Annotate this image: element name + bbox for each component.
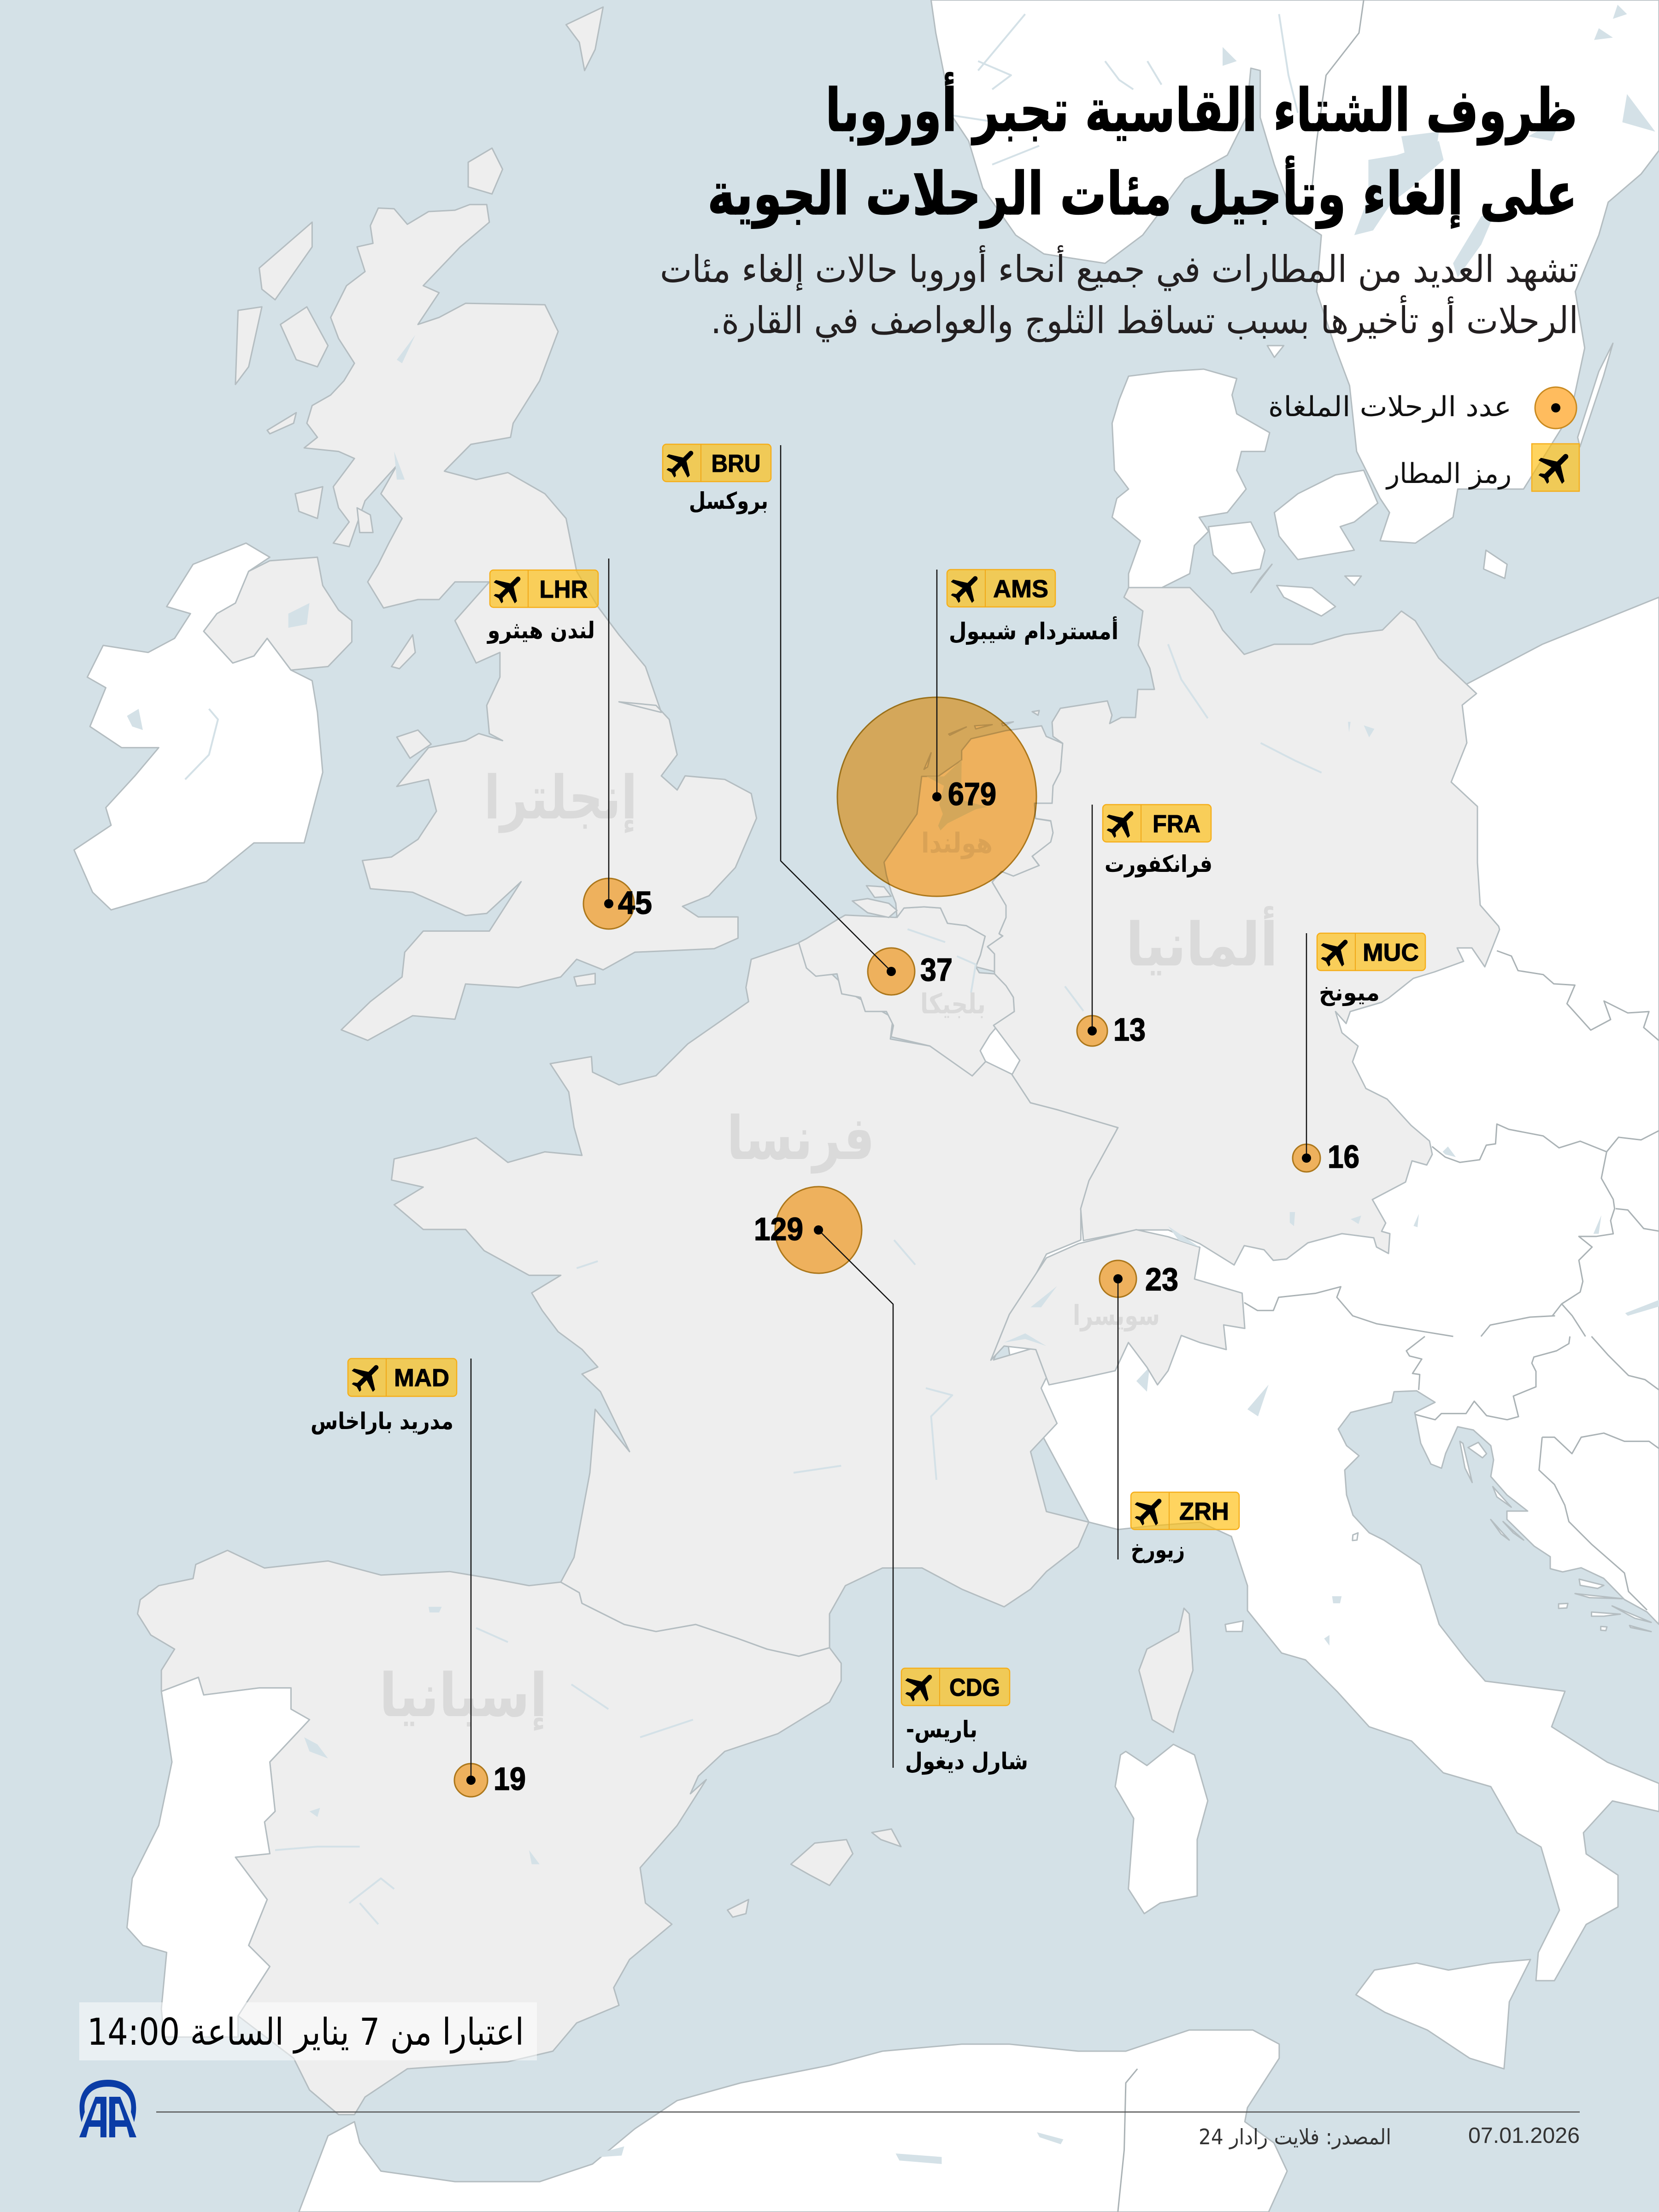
logo: AA xyxy=(79,2080,136,2137)
subtitle xyxy=(660,245,1578,342)
label: LHR xyxy=(486,567,598,644)
marker: MUC 16: 16 xyxy=(1328,1139,1359,1175)
land: Spain and Portugal xyxy=(127,943,1118,2115)
label: England: إنجلترا xyxy=(484,763,637,833)
label: LHR: LHR xyxy=(539,576,588,603)
marker: MUC 16 xyxy=(1293,933,1359,1175)
marker: AMS 679 xyxy=(837,570,1036,896)
legend: airport code text: رمز المطار xyxy=(1385,458,1512,490)
marker: BRU 37: 37 xyxy=(920,952,953,988)
label: ZRH: ZRH xyxy=(1179,1498,1229,1525)
label: BRU: بروكسل xyxy=(689,488,768,515)
label: MUC: ميونخ xyxy=(1319,979,1380,1006)
legend: cancelled flights circle xyxy=(1535,387,1577,429)
label: MUC xyxy=(1314,930,1425,1006)
label: ZRH: زيورخ xyxy=(1131,1536,1185,1564)
marker: MAD 19: 19 xyxy=(494,1761,526,1797)
label: MAD: MAD xyxy=(394,1364,449,1392)
marker: CDG 129 xyxy=(754,1187,893,1768)
land: Corsica, Sardinia, Sicily xyxy=(1115,1367,1530,2069)
label: Switzerland: سويسرا xyxy=(1073,1300,1160,1332)
marker: LHR 45: 45 xyxy=(618,885,652,921)
label: France: فرنسا xyxy=(727,1103,875,1174)
marker: ZRH 23 xyxy=(1100,1260,1178,1559)
label: AMS xyxy=(944,566,1118,645)
timestamp box: اعتبارا من 7 يناير الساعة 14:00 xyxy=(87,2011,524,2054)
legend: airport code swatch xyxy=(1531,443,1579,491)
marker: FRA 13 xyxy=(1077,805,1146,1047)
date: 07.01.2026 xyxy=(1468,2124,1580,2148)
label: FRA: FRA xyxy=(1153,810,1200,838)
label: MAD: مدريد باراخاس xyxy=(311,1408,453,1435)
legend: cancelled flights text: عدد الرحلات الملغاة xyxy=(1268,391,1512,423)
label: MAD xyxy=(311,1355,457,1435)
subtitle: تشهد العديد من المطارات في جميع أنحاء أوروبا حالات إلغاء مئات xyxy=(660,245,1578,291)
marker: FRA 13: 13 xyxy=(1113,1012,1146,1047)
marker: ZRH 23: 23 xyxy=(1145,1261,1178,1297)
label: ZRH xyxy=(1128,1489,1239,1564)
marker: LHR 45 xyxy=(583,559,652,929)
label: LHR: لندن هيثرو xyxy=(486,617,595,644)
label: CDG: CDG xyxy=(949,1674,1000,1701)
marker: MAD 19 xyxy=(454,1359,526,1797)
label: Belgium: بلجيكا xyxy=(920,988,986,1020)
marker: AMS 679: 679 xyxy=(948,776,996,812)
label: BRU: BRU xyxy=(712,450,760,477)
label: MUC: MUC xyxy=(1363,939,1419,966)
title xyxy=(707,72,1577,229)
land: France xyxy=(392,943,1118,1656)
label: CDG xyxy=(899,1665,1028,1775)
label: FRA xyxy=(1100,801,1212,878)
land: Germany xyxy=(988,588,1500,1265)
country labels xyxy=(379,763,1278,1731)
subtitle: الرحلات أو تأخيرها بسبب تساقط الثلوج والعواصف في القارة. xyxy=(711,295,1578,342)
land: Belgium and Netherlands xyxy=(799,711,1063,1076)
label: AMS: AMS xyxy=(993,575,1048,603)
label: Spain: إسبانيا xyxy=(379,1660,547,1731)
land: North Africa xyxy=(299,2030,1287,2212)
label: Netherlands: هولندا xyxy=(921,827,993,859)
land: Switzerland xyxy=(991,644,1374,1385)
source: المصدر: فلايت رادار 24 xyxy=(1199,2124,1391,2149)
label: CDG: شارل ديغول xyxy=(905,1748,1028,1775)
marker: BRU 37 xyxy=(781,445,953,995)
label: Germany: ألمانيا xyxy=(1126,906,1278,980)
label: AMS: أمستردام شيبول xyxy=(949,616,1118,645)
national borders and islands: Adriatic xyxy=(1353,1336,1659,1632)
label: CDG: باريس- xyxy=(906,1716,977,1743)
label: FRA: فرانكفورت xyxy=(1105,851,1212,878)
national borders: central Europe xyxy=(1244,951,1659,1336)
label: BRU xyxy=(660,441,771,515)
land: Norway, Sweden and Denmark xyxy=(931,0,1659,616)
land: continental Europe xyxy=(968,597,1659,1981)
land: Ireland and British Isles xyxy=(74,7,757,1041)
legend xyxy=(1268,387,1579,491)
marker: CDG 129: 129 xyxy=(754,1211,803,1247)
